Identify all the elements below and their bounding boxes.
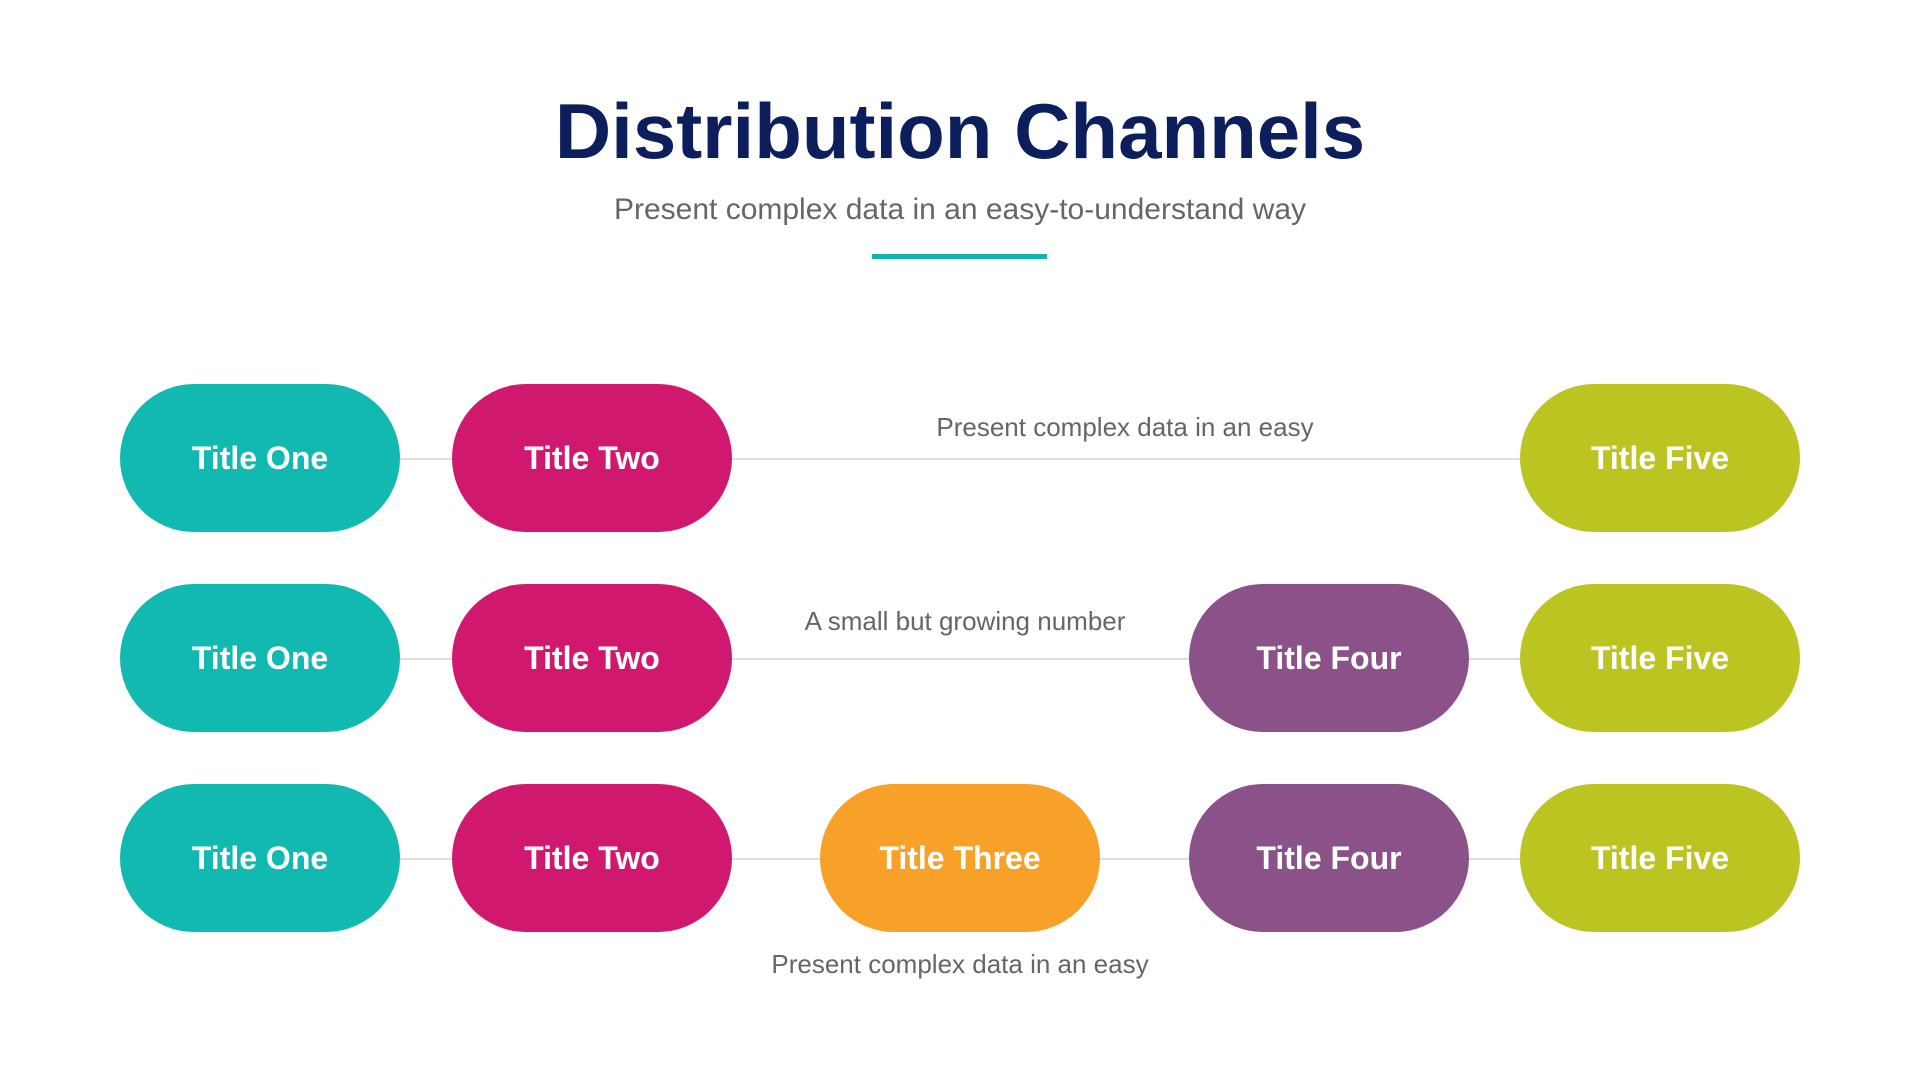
- pill: title five: [1520, 784, 1800, 932]
- pill: title five: [1520, 584, 1800, 732]
- pill: title one: [120, 784, 400, 932]
- pill: title four: [1189, 784, 1469, 932]
- pill: title three: Title Three: [879, 840, 1041, 876]
- pill: title one: Title One: [192, 640, 328, 676]
- pill: title three: [820, 784, 1100, 932]
- title: Distribution Channels: [555, 87, 1365, 175]
- pill: title five: Title Five: [1591, 640, 1729, 676]
- row 2: [120, 584, 1800, 732]
- label: row 2: A small but growing number: [805, 606, 1125, 636]
- subtitle: Present complex data in an easy-to-understand way: [614, 193, 1306, 226]
- pill: title four: Title Four: [1256, 640, 1402, 676]
- label: row 3 bottom: Present complex data in an easy: [771, 949, 1149, 979]
- underline accent: [872, 254, 1047, 259]
- pill: title four: [1189, 584, 1469, 732]
- pill: title one: [120, 584, 400, 732]
- pill: title one: Title One: [192, 840, 328, 876]
- row 1: [120, 384, 1800, 532]
- label: row 1: Present complex data in an easy: [936, 412, 1314, 442]
- pill: title two: [452, 384, 732, 532]
- pill: title two: Title Two: [524, 640, 660, 676]
- pill: title two: [452, 584, 732, 732]
- pill: title two: Title Two: [524, 840, 660, 876]
- pill: title one: Title One: [192, 440, 328, 476]
- pill: title five: Title Five: [1591, 440, 1729, 476]
- pill: title four: Title Four: [1256, 840, 1402, 876]
- pill: title two: [452, 784, 732, 932]
- pill: title five: [1520, 384, 1800, 532]
- pill: title five: Title Five: [1591, 840, 1729, 876]
- pill: title two: Title Two: [524, 440, 660, 476]
- pill: title one: [120, 384, 400, 532]
- row 3: [120, 784, 1800, 932]
